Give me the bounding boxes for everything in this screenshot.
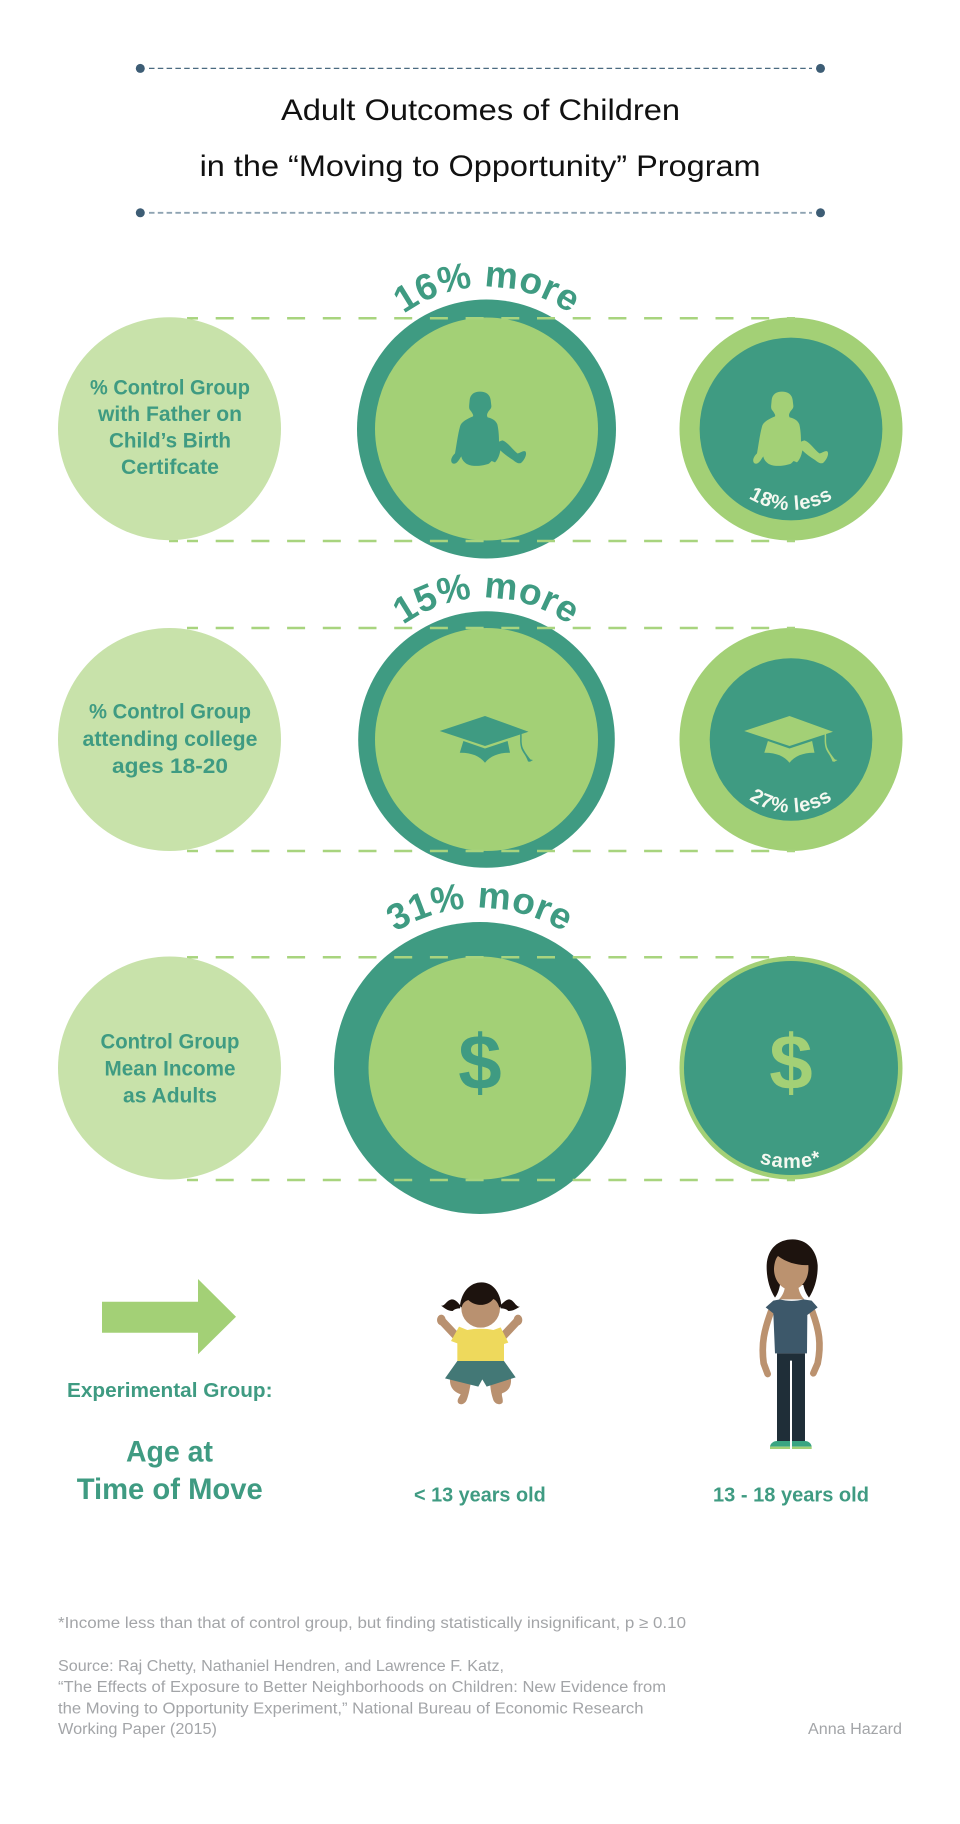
left circle: control group label: Child’s Birth (109, 429, 231, 452)
left circle: control group label: % Control Group (89, 700, 251, 724)
title text: in the “Moving to Opportunity” Program (200, 150, 761, 183)
left circle: control group label (58, 628, 281, 851)
arc label: same*: same* (760, 1150, 819, 1168)
left circle: control group label: with Father on (97, 403, 242, 426)
panel: mean income row (58, 884, 902, 1214)
left circle: control group label: Mean Income (104, 1058, 236, 1080)
age label: 13 to 18: 13 - 18 years old (713, 1485, 869, 1507)
footnote: *Income less than that of control group, but finding statistically insignificant, p ≥ 0.10 (58, 1615, 686, 1632)
comparison dashed guides (187, 628, 795, 851)
right circle: 13-18 group, same: $ (769, 1018, 813, 1106)
comparison dashed guides (169, 318, 795, 541)
arc label: 18% less: 18% less (750, 488, 832, 510)
panel: college attendance row (58, 574, 902, 868)
title text: Adult Outcomes of Children (281, 94, 680, 127)
arc label: 15% more: 15% more (394, 574, 576, 624)
age at time of move heading (77, 1436, 263, 1506)
author credit: Anna Hazard (808, 1721, 902, 1738)
age label: under 13: < 13 years old (414, 1485, 546, 1507)
comparison dashed guides (187, 957, 795, 1180)
left circle: control group label: as Adults (123, 1084, 217, 1108)
title text (200, 94, 761, 183)
arrow (102, 1279, 236, 1354)
source text: Source: Raj Chetty, Nathaniel Hendren, and Lawrence F. Katz, (58, 1658, 504, 1675)
left circle: control group label (58, 317, 281, 540)
middle circle: under 13 group, 15% more (358, 611, 615, 868)
top dotted rule (136, 64, 825, 73)
icon: young girl (437, 1282, 522, 1404)
left circle: control group label: Control Group (100, 1030, 240, 1054)
left circle: control group label: Certifcate (121, 456, 219, 479)
arc label: 27% less: 27% less (750, 789, 831, 812)
icon: teenage girl (763, 1239, 820, 1449)
left circle: control group label: attending college (82, 728, 258, 751)
arc label: 31% more: 31% more (386, 884, 570, 929)
arc label: 16% more: 16% more (394, 263, 576, 312)
panel: age at time of move legend (67, 1239, 869, 1507)
middle circle: under 13 group, 16% more (357, 300, 616, 558)
experimental group label: Experimental Group: (67, 1380, 272, 1402)
right circle: 13-18 group, same (680, 956, 902, 1180)
source text: Working Paper (2015) (58, 1721, 217, 1738)
age at time of move heading: Time of Move (77, 1473, 263, 1506)
right circle: 13-18 group, 27% less (680, 628, 902, 851)
source text: the Moving to Opportunity Experiment,” National Bureau of Economic Research (58, 1700, 644, 1718)
left circle: control group label: % Control Group (90, 376, 250, 400)
left circle: control group label: ages 18-20 (112, 755, 228, 778)
left circle: control group label (58, 956, 281, 1180)
bottom dotted rule (136, 208, 825, 217)
right circle: 13-18 group, 18% less (680, 318, 902, 540)
age at time of move heading: Age at (126, 1436, 213, 1469)
source text (58, 1658, 666, 1738)
middle circle: under 13 group, 31% more (334, 922, 626, 1214)
title block (136, 64, 825, 217)
source text: “The Effects of Exposure to Better Neighborhoods on Children: New Evidence from (58, 1679, 666, 1696)
middle circle: under 13 group, 31% more: $ (458, 1018, 502, 1106)
panel: father on birth certificate row (58, 263, 902, 558)
